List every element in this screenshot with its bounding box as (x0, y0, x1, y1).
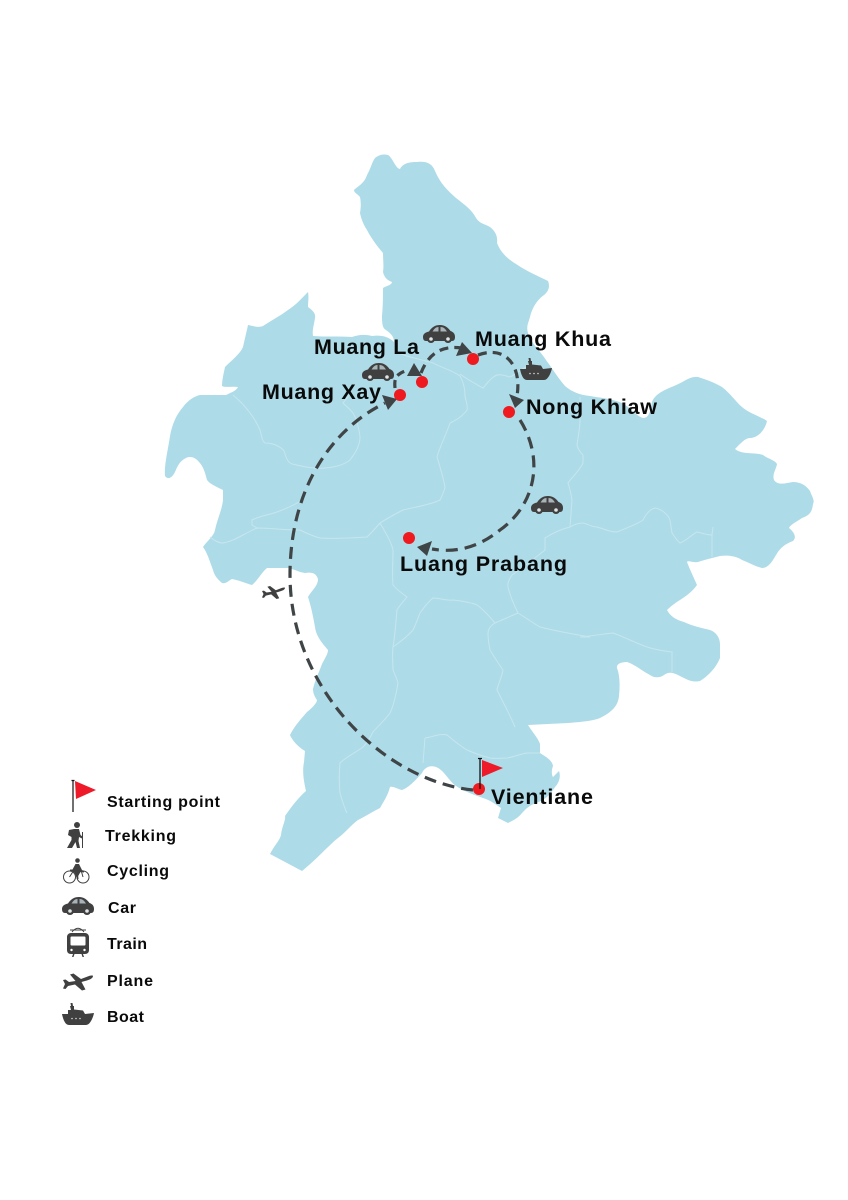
car leg Muang Xay to Muang La (395, 370, 408, 388)
icon: plane on route (262, 586, 285, 599)
label: Vientiane: Vientiane (491, 785, 593, 809)
route: dashed travel line (290, 347, 534, 790)
label: Muang La: Muang La (314, 335, 420, 359)
city labels (262, 327, 657, 809)
legend: plane: Plane (107, 973, 153, 990)
route stop markers (394, 353, 515, 795)
legend: cycling (64, 858, 169, 883)
legend: car (62, 897, 136, 917)
car leg Nong Khiaw to Luang Prabang (432, 420, 534, 550)
legend: plane (63, 973, 153, 990)
icon: car near Muang Khua (423, 325, 455, 343)
route arrowheads (382, 342, 524, 556)
legend: starting point (72, 780, 221, 812)
label: Nong Khiaw: Nong Khiaw (526, 395, 657, 419)
legend (62, 780, 221, 1026)
legend: starting point: Starting point (107, 794, 221, 811)
legend: train (67, 928, 147, 957)
flight leg Vientiane to Muang Xay (290, 403, 473, 790)
legend: cycling: Cycling (107, 863, 169, 880)
province borders (210, 352, 713, 813)
legend: boat (62, 1003, 145, 1026)
boat leg Muang Khua to Nong Khiaw (478, 352, 518, 396)
map of northern Laos (165, 154, 814, 871)
label: Muang Xay: Muang Xay (262, 380, 381, 404)
label: Luang Prabang: Luang Prabang (400, 552, 567, 576)
legend: trekking: Trekking (105, 828, 176, 845)
legend: boat: Boat (107, 1009, 145, 1026)
icon: car near Luang Prabang (531, 496, 563, 514)
legend: car: Car (108, 900, 136, 917)
legend: train: Train (107, 936, 147, 953)
icon: car near Muang La (362, 363, 394, 381)
icon: boat on route (520, 358, 552, 380)
legend: trekking (67, 822, 176, 848)
car leg Muang La to Muang Khua (421, 347, 462, 373)
label: Muang Khua: Muang Khua (475, 327, 612, 351)
icon: starting flag Vientiane (478, 758, 503, 789)
